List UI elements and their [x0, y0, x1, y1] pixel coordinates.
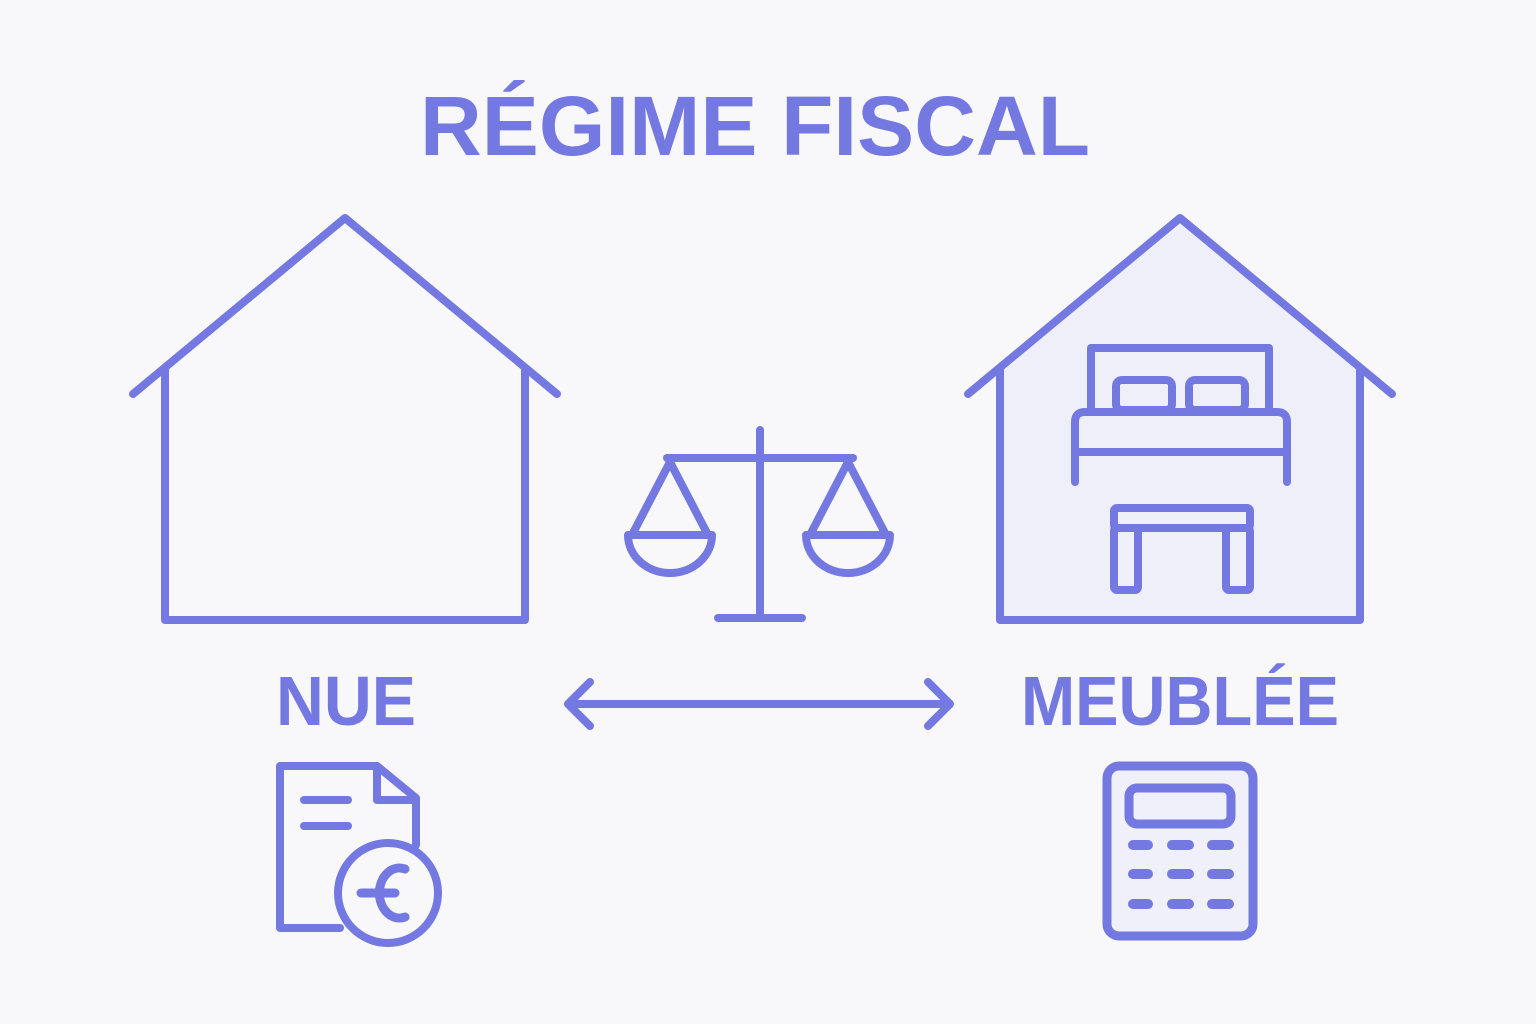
icon: bench — [1114, 508, 1250, 590]
arrow: double-headed — [568, 682, 950, 726]
icon: balance scale — [628, 430, 890, 618]
title: RÉGIME FISCAL — [420, 79, 1090, 173]
icon: house unfurnished — [133, 218, 557, 620]
icon: house furnished — [968, 218, 1392, 620]
label: NUE: NUE — [276, 662, 416, 740]
icon: bed — [1075, 348, 1287, 482]
icon: document with euro — [280, 766, 438, 943]
label: MEUBLÉE: MEUBLÉE — [1021, 662, 1339, 740]
icon: calculator — [1107, 766, 1253, 936]
